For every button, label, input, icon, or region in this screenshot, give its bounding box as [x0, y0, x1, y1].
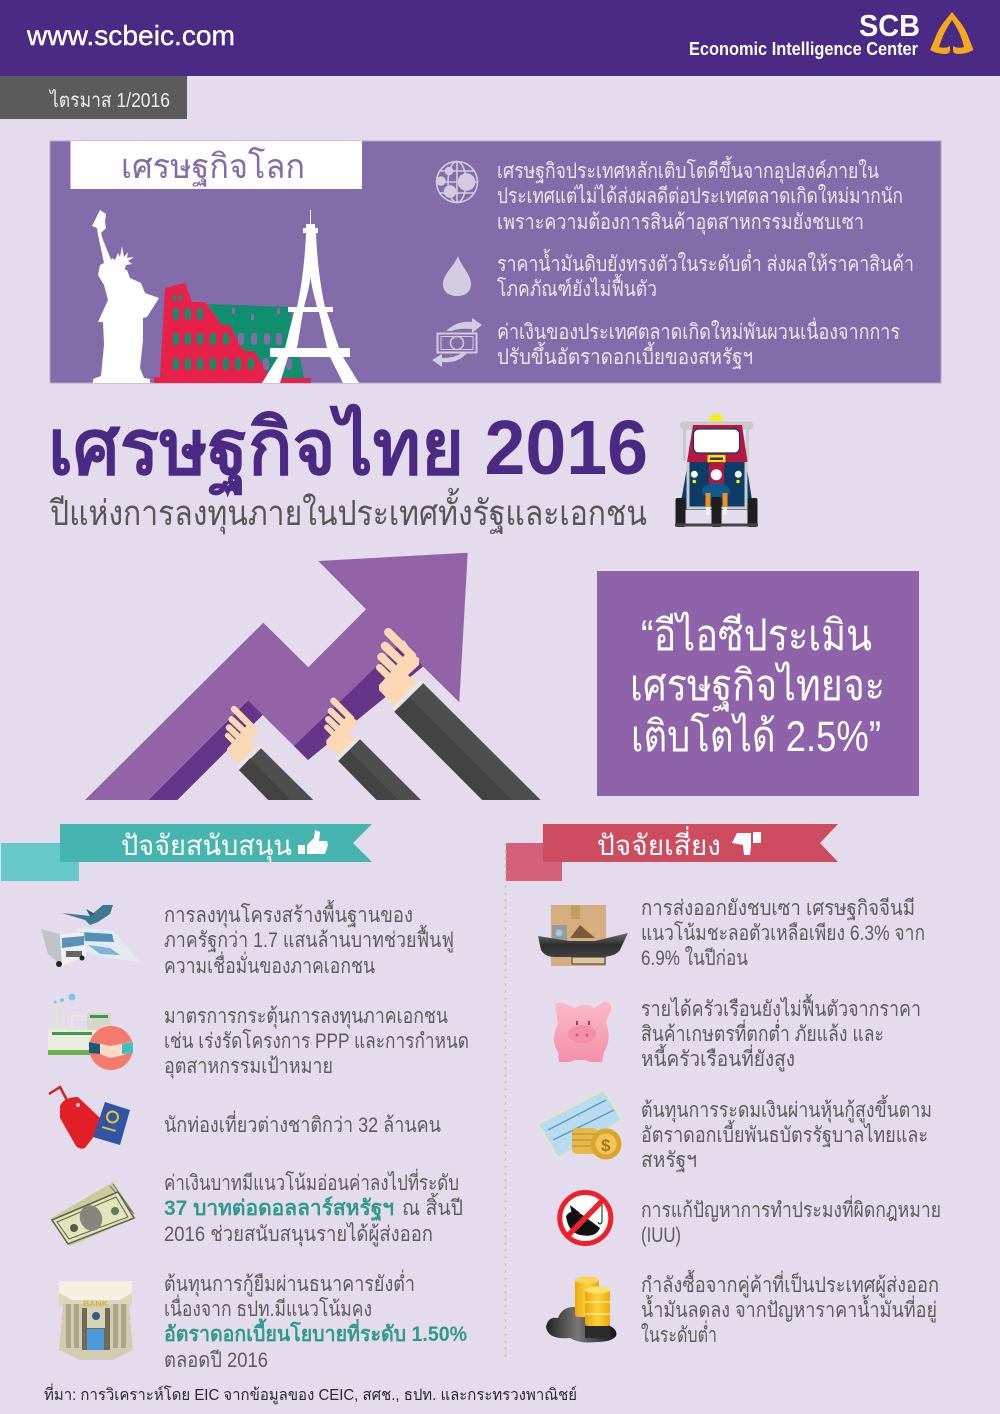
icon: globe with currencies: [436, 161, 478, 203]
icon: thumbs down: [732, 832, 761, 855]
text: oil exporters: น้ำมันลดลง จากปัญหาราคาน้ำมันที่อยู่: [641, 1295, 937, 1323]
text: iuu: การแก้ปัญหาการทำประมงที่ผิดกฎหมาย: [641, 1195, 941, 1222]
icon: cheque and coins: $: [601, 1136, 611, 1155]
text: household income: สินค้าเกษตรที่ตกต่ำ ภัยแล้ง และ: [641, 1019, 884, 1046]
icon: plane, truck and train: [41, 905, 140, 967]
quote box: เศรษฐกิจไทยจะ: [630, 661, 885, 711]
text: oil exporters: ในระดับต่ำ: [641, 1320, 717, 1347]
quote box: “อีไอซีประเมิน: [641, 611, 872, 660]
source: ที่มา: การวิเคราะห์โดย EIC จากข้อมูลของ CEIC, สศช., ธปท. และกระทรวงพาณิชย์: [44, 1383, 577, 1405]
heading ribbon: supporting factors: [1, 824, 372, 881]
hand 2: [326, 701, 356, 756]
text: private investment: อุตสาหกรรมเป้าหมาย: [164, 1055, 333, 1079]
icon: tuk-tuk: [675, 414, 758, 527]
icon: statue of liberty: [92, 210, 159, 383]
text: bond funding costs: ต้นทุนการระดมเงินผ่านหุ้นกู้สูงขึ้นตาม: [641, 1095, 932, 1123]
text: oil exporters: [641, 1270, 939, 1347]
text: exports: 6.9% ในปีก่อน: [641, 946, 748, 970]
text: world economy bullets: เพราะความต้องการสินค้าอุตสาหกรรมยังชบเซา: [497, 211, 864, 235]
sleeve 1: [238, 746, 313, 800]
sleeve 3: [393, 681, 541, 800]
text: world economy bullets: เศรษฐกิจประเทศหลักเติบโตดีขึ้นจากอุปสงค์ภายใน: [497, 156, 879, 184]
text: borrowing costs: [164, 1269, 467, 1372]
icon: bank: BANK: [83, 1301, 108, 1308]
header bar: [0, 0, 1000, 76]
text: infrastructure: [164, 900, 454, 978]
heading tab: world economy: เศรษฐกิจโลก: [121, 147, 305, 187]
text: world economy bullets: ราคาน้ำมันดิบยังทรงตัวในระดับต่ำ ส่งผลให้ราคาสินค้า: [497, 249, 914, 276]
SCB wordmark: SCB: [859, 8, 920, 43]
icon: suitcase and passport: [49, 1087, 130, 1149]
text: infrastructure: การลงทุนโครงสร้างพื้นฐานของ: [164, 900, 413, 928]
text: baht: 2016 ช่วยสนับสนุนรายได้ผู้ส่งออก: [164, 1222, 433, 1247]
text: private investment: [164, 1005, 469, 1079]
text: baht: 37 บาทต่อดอลลาร์สหรัฐฯ: [164, 1196, 394, 1222]
heading tab: world economy: [70, 141, 362, 189]
quarter tag: [0, 76, 187, 119]
icon: currency exchange arrows: [432, 318, 482, 367]
text: iuu: (IUU): [641, 1224, 681, 1247]
icon: no illegal fishing: [560, 1192, 611, 1244]
title: เศรษฐกิจไทย 2016: [48, 403, 648, 497]
text: household income: รายได้ครัวเรือนยังไม่ฟื้นตัวจากราคา: [641, 994, 921, 1021]
heading ribbon: risk factors: ปัจจัยเสี่ยง: [597, 826, 721, 861]
panel: world economy: [50, 141, 941, 383]
text: world economy bullets: ค่าเงินของประเทศตลาดเกิดใหม่พันผวนเนื่องจากการ: [497, 317, 900, 344]
text: baht: ค่าเงินบาทมีแนวโน้มอ่อนค่าลงไปที่ระดับ: [164, 1168, 459, 1195]
text: household income: หนี้ครัวเรือนที่ยังสูง: [641, 1044, 795, 1072]
icon: eiffel tower: [262, 210, 359, 383]
icon: factory and handshake: [48, 994, 133, 1070]
icon: dollar banknotes: [50, 1182, 136, 1246]
text: bond funding costs: อัตราดอกเบี้ยพันธบัตรรัฐบาลไทยและ: [641, 1120, 928, 1147]
arrow shadow: [148, 640, 425, 800]
text: iuu: [641, 1195, 941, 1247]
icon: SCB logo: [930, 12, 974, 54]
text: private investment: มาตรการกระตุ้นการลงทุนภาคเอกชน: [164, 1005, 448, 1029]
icon: oil drop: [443, 256, 471, 296]
text: private investment: เช่น เร่งรัดโครงการ PPP และการกำหนด: [164, 1029, 469, 1053]
text: exports: การส่งออกยังชบเซา เศรษฐกิจจีนมี: [641, 897, 915, 920]
text: baht: ณ สิ้นปี: [402, 1193, 463, 1220]
icon: cheque and coins: [538, 1090, 622, 1160]
text: infrastructure: ความเชื่อมั่นของภาคเอกชน: [164, 951, 375, 978]
text: world economy bullets: ปรับขึ้นอัตราดอกเบี้ยของสหรัฐฯ: [497, 342, 753, 369]
sleeve 2: [337, 737, 421, 800]
hand 1: [227, 709, 257, 764]
heading ribbon: supporting factors: ปัจจัยสนับสนุน: [121, 830, 292, 863]
text: exports: [641, 897, 925, 970]
icon: cargo ship: [538, 905, 628, 966]
SCB wordmark: Economic Intelligence Center: [689, 39, 918, 59]
arrow: [85, 553, 468, 800]
quote box: เติบโตได้ 2.5%”: [631, 712, 881, 761]
text: tourists: นักท่องเที่ยวต่างชาติกว่า 32 ล้านคน: [164, 1110, 441, 1137]
quarter tag: ไตรมาส 1/2016: [48, 89, 170, 112]
SCB wordmark: [689, 8, 920, 59]
icon: colosseum: [154, 283, 311, 383]
hand 3: [379, 632, 419, 706]
text: borrowing costs: เนื่องจาก ธปท.มีแนวโน้มคง: [164, 1294, 372, 1321]
text: borrowing costs: อัตราดอกเบี้ยนโยบายที่ระดับ 1.50%: [164, 1318, 467, 1346]
text: oil exporters: กำลังซื้อจากคู่ค้าที่เป็นประเทศผู้ส่งออก: [641, 1270, 939, 1298]
text: infrastructure: ภาครัฐกว่า 1.7 แสนล้านบาทช่วยฟื้นฟู: [164, 925, 454, 953]
icon: bank: [59, 1281, 133, 1360]
text: bond funding costs: สหรัฐฯ: [641, 1149, 697, 1172]
icon: piggy bank: [554, 1002, 611, 1062]
icon: oil barrels: [546, 1276, 616, 1342]
website url: www.scbeic.com: [26, 20, 235, 51]
quote box: [597, 571, 919, 796]
icon: thumbs up: [298, 830, 328, 854]
text: world economy bullets: ประเทศแต่ไม่ได้ส่งผลดีต่อประเทศตลาดเกิดใหม่มากนัก: [497, 184, 903, 208]
text: exports: แนวโน้มชะลอตัวเหลือเพียง 6.3% จาก: [641, 921, 925, 945]
chart: rising arrow held by hands: [85, 553, 541, 800]
heading ribbon: risk factors: [506, 824, 838, 881]
text: household income: [641, 994, 921, 1072]
subtitle: ปีแห่งการลงทุนภายในประเทศทั้งรัฐและเอกชน: [49, 487, 647, 534]
text: bond funding costs: [641, 1095, 932, 1172]
text: world economy bullets: โภคภัณฑ์ยังไม่ฟื้นตัว: [497, 274, 657, 301]
text: borrowing costs: ต้นทุนการกู้ยืมผ่านธนาคารยังต่ำ: [164, 1269, 415, 1297]
text: borrowing costs: ตลอดปี 2016: [164, 1349, 268, 1372]
text: baht: [164, 1168, 463, 1247]
text: world economy bullets: [497, 156, 914, 369]
